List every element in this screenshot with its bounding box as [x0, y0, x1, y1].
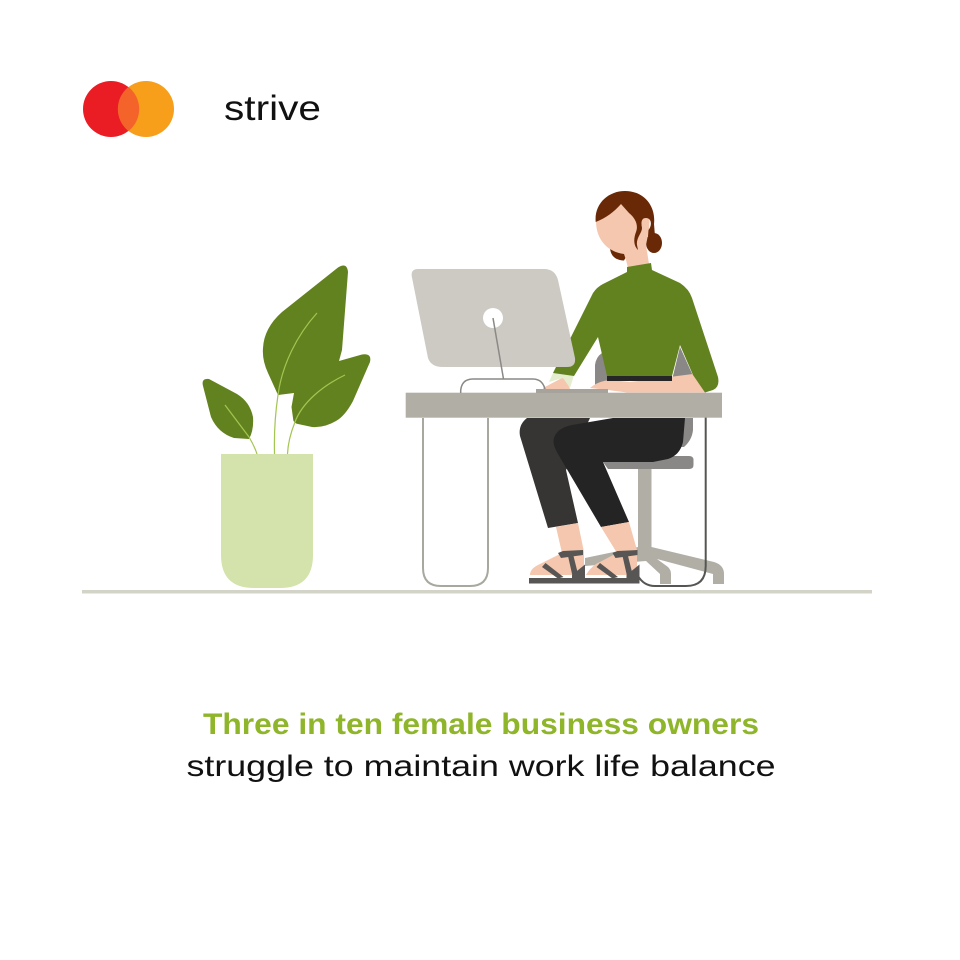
sandal left	[529, 550, 585, 584]
trousers back leg	[520, 418, 590, 528]
chair back	[595, 347, 694, 447]
sweater	[553, 263, 718, 392]
headline: Three in ten female business owners	[203, 708, 759, 741]
chair stem and base	[585, 469, 724, 584]
woman	[520, 191, 718, 584]
monitor dot	[483, 308, 503, 328]
hair bun	[646, 233, 662, 253]
forearm	[590, 374, 706, 392]
keyboard	[536, 389, 608, 393]
logo wordmark: strive	[224, 89, 321, 128]
desk right leg	[638, 413, 706, 586]
hand	[543, 378, 570, 389]
waist	[607, 375, 672, 381]
desk left leg	[423, 418, 488, 586]
subheadline: struggle to maintain work life balance	[186, 750, 776, 783]
logo: overlapping circles	[83, 81, 174, 137]
desk top	[406, 393, 722, 418]
neck and face	[596, 200, 650, 268]
chair seat	[603, 456, 694, 469]
plant stems and veins	[225, 313, 345, 454]
right calf and foot	[586, 522, 637, 575]
hair	[596, 191, 655, 250]
monitor stand base	[461, 379, 546, 393]
plant	[203, 266, 370, 588]
floor line	[82, 590, 872, 594]
small leaf	[203, 379, 253, 439]
hair lower back	[610, 248, 630, 260]
large leaf pair	[263, 266, 370, 427]
computer	[412, 269, 608, 393]
monitor	[412, 269, 575, 367]
trousers front leg	[554, 418, 685, 527]
chair	[585, 347, 724, 584]
pot	[221, 454, 313, 588]
sleeve cuff	[549, 373, 574, 388]
left calf and foot	[530, 523, 584, 575]
monitor arm	[493, 318, 504, 379]
sandal right	[585, 550, 640, 584]
